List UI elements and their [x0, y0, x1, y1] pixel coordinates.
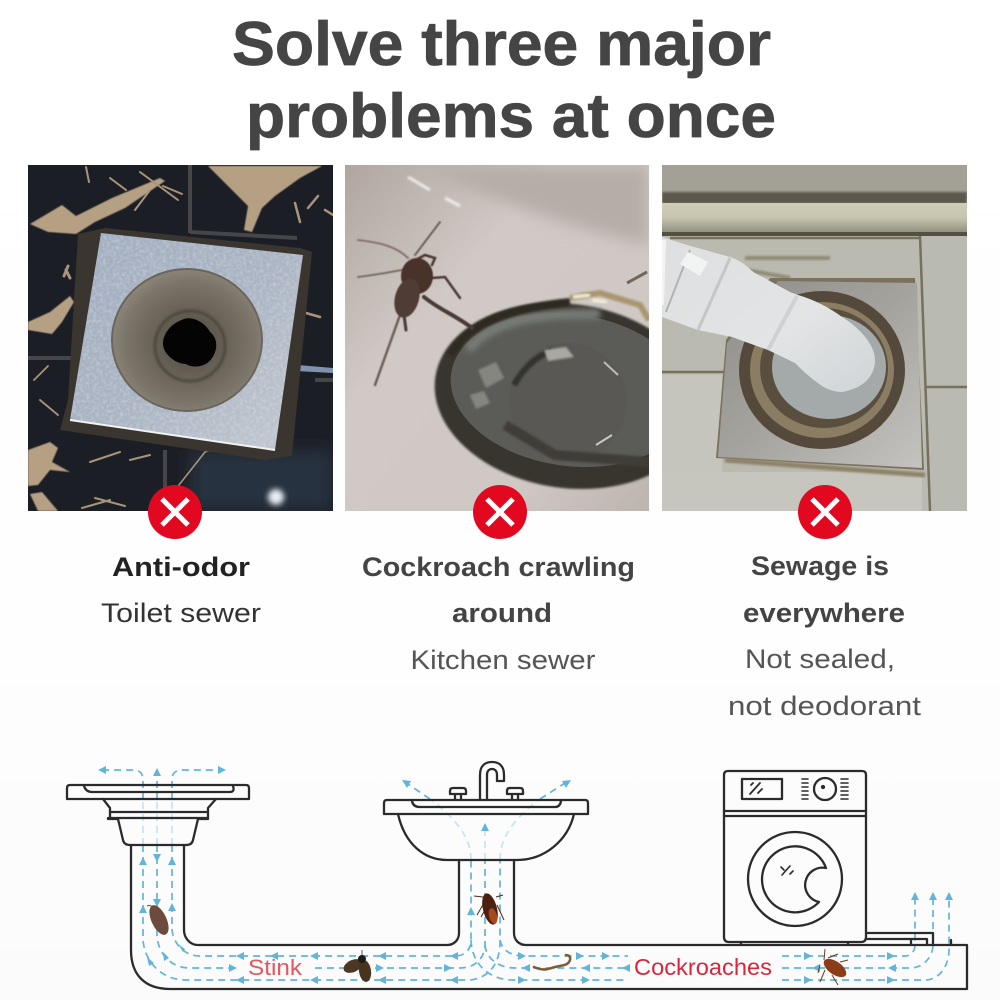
- bug: cockroach right: [818, 949, 849, 985]
- caption: cockroach crawling: around: [452, 598, 552, 628]
- washing machine: [724, 771, 933, 945]
- caption: anti-odor: Toilet sewer: [101, 598, 261, 628]
- white hose: [662, 237, 875, 392]
- caption: sewage: not deodorant: [728, 691, 922, 721]
- panel: kitchen sewer photo: [345, 165, 649, 511]
- caption: sewage: [728, 551, 922, 721]
- cockroach in sink: [358, 222, 472, 385]
- bug: cockroach in pipe: [474, 892, 504, 926]
- caption: sewage: Sewage is: [751, 551, 889, 581]
- caption: cockroach crawling: [362, 552, 635, 675]
- rusty drain ring: [739, 291, 905, 449]
- airflow arrows: [98, 766, 953, 984]
- diagram: pipe system: [67, 762, 967, 989]
- caption: cockroach crawling: Cockroach crawling: [362, 552, 635, 582]
- title: [232, 10, 776, 151]
- label: cockroaches: Cockroaches: [634, 954, 772, 980]
- panel: toilet sewer photo: [28, 165, 333, 511]
- floor drain: [67, 785, 249, 845]
- icon: red cross 3: [798, 485, 852, 539]
- drain hole: [163, 318, 216, 366]
- sink drain ring: [433, 288, 649, 491]
- panel: sewage photo: [662, 165, 967, 511]
- caption: anti-odor: Anti-odor: [112, 552, 251, 582]
- bug: woodlouse: [145, 902, 173, 938]
- title: problems at once: [246, 82, 776, 151]
- bug: moth fly: [341, 950, 372, 983]
- pipe outline: [131, 845, 967, 989]
- icon: red cross 2: [473, 485, 527, 539]
- label: stink: Stink: [248, 955, 303, 980]
- caption: sewage: everywhere: [743, 598, 905, 628]
- sink: [384, 762, 588, 860]
- bug: worm: [534, 955, 570, 969]
- caption: anti-odor: [101, 552, 261, 628]
- caption: cockroach crawling: Kitchen sewer: [410, 645, 596, 675]
- title: Solve three major: [232, 10, 771, 79]
- icon: red cross 1: [148, 485, 202, 539]
- caption: sewage: Not sealed,: [745, 644, 895, 674]
